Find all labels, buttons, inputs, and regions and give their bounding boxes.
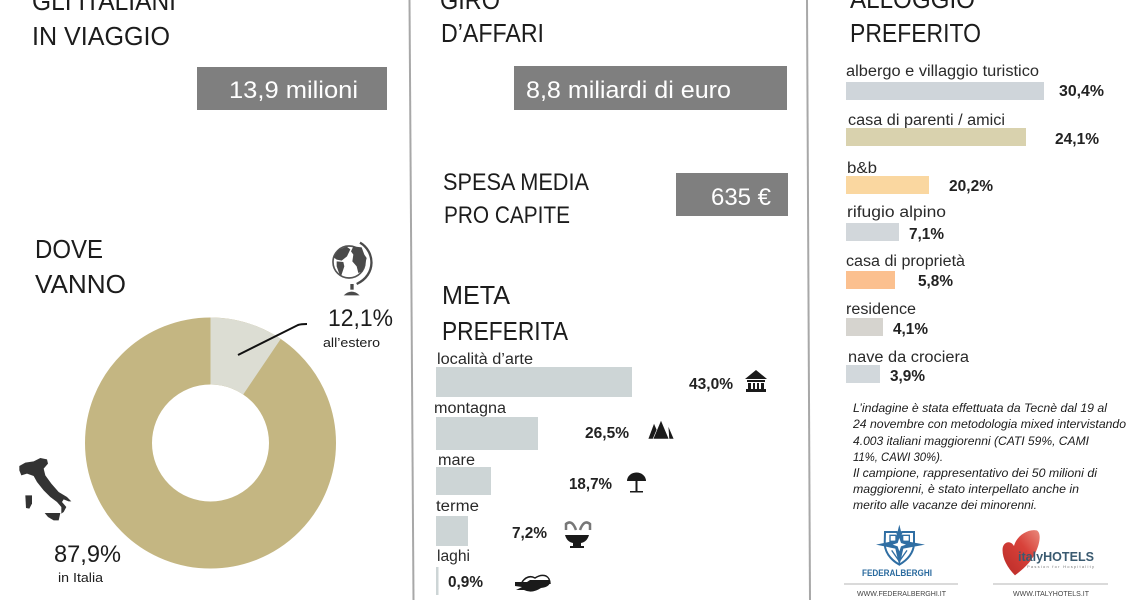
heading: spesa media pro capite: SPESA MEDIA bbox=[443, 169, 589, 196]
bar: albergo e villaggio turistico 30,4%: 30,4% bbox=[1059, 83, 1104, 100]
bar: albergo e villaggio turistico 30,4% bbox=[846, 63, 1104, 100]
bar: albergo e villaggio turistico 30,4%: albergo e villaggio turistico bbox=[846, 63, 1039, 80]
bar: casa di parenti / amici 24,1%: 24,1% bbox=[1055, 131, 1099, 148]
bar: casa di parenti / amici 24,1% bbox=[846, 112, 1099, 148]
callout: 12,1% all'estero: all’estero bbox=[323, 336, 380, 350]
bar: mare 18,7%: mare bbox=[438, 452, 475, 469]
heading: spesa media pro capite bbox=[443, 169, 589, 229]
text block: survey note: 11%, CAWI 30%). bbox=[853, 452, 943, 464]
icon: beach umbrella bbox=[627, 472, 646, 492]
heading: meta preferita bbox=[442, 280, 569, 346]
logo: italyHOTELS: Passion for Hospitality bbox=[1027, 564, 1094, 569]
stat box: 635 euro: 635 € bbox=[711, 184, 772, 211]
bar: mare 18,7%: 18,7% bbox=[569, 476, 612, 493]
text block: survey note: Il campione, rappresentativo dei 50 milioni di bbox=[853, 468, 1097, 480]
bar: località d'arte 43,0% bbox=[436, 351, 733, 397]
bar: casa di proprietà 5,8% bbox=[846, 253, 965, 290]
bar: terme 7,2%: 7,2% bbox=[512, 525, 547, 542]
heading: dove vanno: DOVE bbox=[35, 234, 103, 264]
bar: località d'arte 43,0%: 43,0% bbox=[689, 376, 733, 393]
panel: alloggio preferito bbox=[844, 0, 1127, 598]
label: 87,9% in Italia: 87,9% bbox=[54, 541, 121, 568]
heading: giro d'affari bbox=[440, 0, 544, 48]
bar: montagna 26,5%: 26,5% bbox=[585, 425, 629, 442]
bar: località d'arte 43,0%: località d’arte bbox=[437, 351, 533, 368]
bar: casa di proprietà 5,8%: 5,8% bbox=[918, 273, 953, 290]
bar: b&b 20,2% bbox=[846, 160, 993, 195]
bar: rifugio alpino 7,1% bbox=[846, 204, 946, 243]
label: 87,9% in Italia: in Italia bbox=[58, 571, 103, 585]
bar: rifugio alpino 7,1%: 7,1% bbox=[909, 226, 944, 243]
logo: italyHOTELS bbox=[993, 530, 1108, 598]
callout: 12,1% all'estero: 12,1% bbox=[328, 305, 393, 332]
heading: giro d'affari: D’AFFARI bbox=[441, 18, 544, 48]
heading: alloggio preferito bbox=[850, 0, 981, 48]
text block: survey note: 4.003 italiani maggiorenni (CATI 59%, CAMI bbox=[853, 436, 1090, 448]
icon: mountains bbox=[648, 420, 674, 439]
bar: laghi 0,9%: 0,9% bbox=[448, 574, 483, 591]
bar: b&b 20,2%: b&b bbox=[847, 160, 877, 177]
logo: Federalberghi: FEDERALBERGHI bbox=[862, 568, 932, 579]
bar: residence 4,1% bbox=[846, 301, 928, 338]
logo: Federalberghi: WWW.FEDERALBERGHI.IT bbox=[857, 589, 946, 598]
heading: dove vanno bbox=[35, 234, 126, 299]
heading: meta preferita: PREFERITA bbox=[442, 316, 569, 346]
stat box: 13,9 milioni: 13,9 milioni bbox=[229, 77, 358, 104]
heading: gli italiani in viaggio bbox=[32, 0, 176, 51]
label: 87,9% in Italia bbox=[54, 541, 121, 585]
bar: laghi 0,9% bbox=[436, 548, 483, 595]
stat box: 635 euro bbox=[676, 173, 788, 216]
logo: italyHOTELS: WWW.ITALYHOTELS.IT bbox=[1013, 589, 1089, 598]
bar: montagna 26,5%: montagna bbox=[434, 400, 506, 417]
bar: nave da crociera 3,9%: nave da crociera bbox=[848, 349, 969, 366]
stat box: 8,8 miliardi di euro bbox=[514, 66, 787, 110]
icon: temple bbox=[745, 370, 767, 392]
bar: mare 18,7% bbox=[436, 452, 612, 495]
heading: gli italiani in viaggio: IN VIAGGIO bbox=[32, 21, 170, 51]
icon: globe bbox=[333, 243, 371, 295]
heading: meta preferita: META bbox=[442, 280, 511, 310]
bar: nave da crociera 3,9% bbox=[846, 349, 969, 385]
stat box: 13,9 milioni bbox=[197, 67, 387, 110]
callout: 12,1% all'estero bbox=[238, 305, 393, 355]
text block: survey note: merito alle vacanze dei minorenni. bbox=[853, 500, 1037, 512]
heading: dove vanno: VANNO bbox=[35, 269, 126, 299]
heading: spesa media pro capite: PRO CAPITE bbox=[444, 202, 570, 229]
heading: alloggio preferito: PREFERITO bbox=[850, 18, 981, 48]
bar: residence 4,1%: residence bbox=[846, 301, 916, 318]
donut chart bbox=[118, 318, 302, 535]
text block: survey note: L’indagine è stata effettuata da Tecnè dal 19 al bbox=[853, 403, 1107, 415]
text block: survey note bbox=[852, 403, 1127, 512]
icon: map of Italy bbox=[19, 458, 71, 520]
bar: terme 7,2%: terme bbox=[436, 498, 479, 515]
logo: Federalberghi bbox=[844, 525, 958, 598]
icon: fountain bbox=[565, 522, 590, 548]
bar: laghi 0,9%: laghi bbox=[437, 548, 470, 565]
panel: gli italiani in viaggio bbox=[19, 0, 393, 585]
bar: terme 7,2% bbox=[436, 498, 547, 546]
stat box: 8,8 miliardi di euro: 8,8 miliardi di euro bbox=[526, 77, 731, 104]
bar: casa di proprietà 5,8%: casa di proprietà bbox=[846, 253, 965, 270]
bar: montagna 26,5% bbox=[434, 400, 629, 450]
text block: survey note: maggiorenni, è stato interpellato anche in bbox=[853, 484, 1079, 496]
bar: casa di parenti / amici 24,1%: casa di parenti / amici bbox=[848, 112, 1005, 129]
panel: giro d'affari, spesa, meta preferita bbox=[434, 0, 788, 595]
logo: italyHOTELS: italyHOTELS bbox=[1018, 549, 1094, 564]
bar: nave da crociera 3,9%: 3,9% bbox=[890, 368, 925, 385]
text block: survey note: 24 novembre con metodologia mixed intervistando bbox=[852, 419, 1127, 431]
bar: residence 4,1%: 4,1% bbox=[893, 321, 928, 338]
bar: rifugio alpino 7,1%: rifugio alpino bbox=[847, 204, 946, 221]
icon: lake bbox=[515, 575, 550, 592]
bar: b&b 20,2%: 20,2% bbox=[949, 178, 993, 195]
